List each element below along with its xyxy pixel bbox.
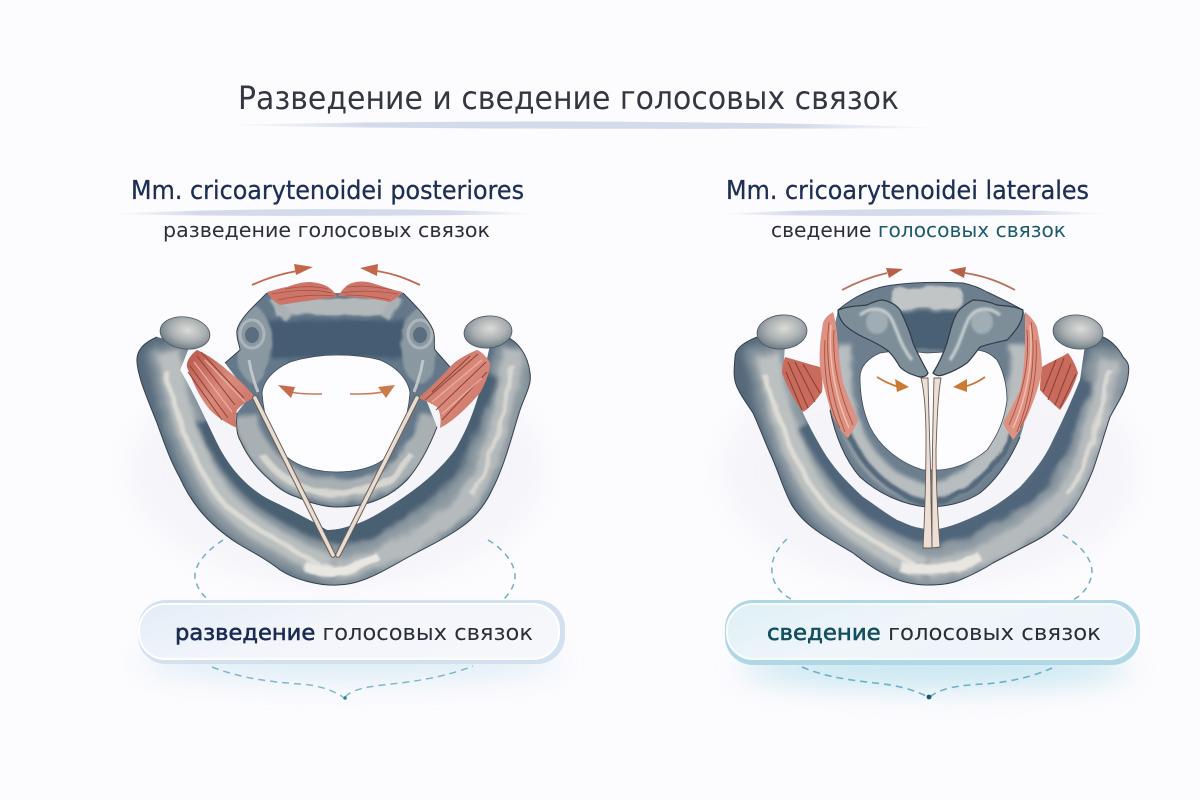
side muscle right — [1040, 353, 1078, 410]
side muscle left — [782, 357, 822, 412]
glottic opening — [262, 355, 410, 472]
cricoid ring — [224, 292, 450, 508]
thyroid cartilage — [136, 336, 531, 586]
right heading: Mm. cricoarytenoidei laterales — [726, 176, 1089, 206]
brace tip left — [343, 696, 347, 700]
pill text right: сведение голосовых связок — [767, 621, 1101, 646]
title: Разведение и сведение голосовых связок — [238, 79, 899, 117]
right larynx soft shadow — [725, 355, 1135, 585]
result pill right — [725, 600, 1140, 665]
vocal cord right — [338, 398, 417, 555]
dashed bracket upper right — [772, 535, 1092, 603]
left hyoid knob — [158, 314, 212, 352]
arytenoid right — [933, 300, 1023, 376]
arrow: top right right panel — [949, 267, 1015, 290]
glow under right pill — [740, 648, 1130, 688]
arrow: inner left right panel — [877, 377, 909, 392]
title underline swoosh — [222, 122, 945, 129]
arytenoid left — [838, 300, 928, 377]
right hyoid knob — [463, 314, 513, 350]
cricoid ring right — [830, 282, 1025, 508]
arrow: inner left — [278, 385, 322, 398]
panel: left, posterior muscles — [110, 176, 565, 700]
illustration: larynx with adducted cords — [725, 280, 1140, 595]
long muscle right — [1003, 312, 1042, 440]
muscle: top left — [267, 282, 337, 305]
long muscle left — [820, 312, 858, 438]
muscle: top right — [338, 282, 403, 302]
hyoid knob right — [1051, 312, 1105, 352]
dashed brace lower left — [212, 666, 473, 697]
muscle: right lateral band — [418, 350, 490, 428]
left heading underline — [110, 209, 540, 216]
arrow: top left — [252, 264, 313, 285]
result pill left — [138, 600, 565, 664]
arrow: inner right right panel — [953, 377, 985, 392]
left heading: Mm. cricoarytenoidei posteriores — [131, 176, 524, 206]
illustration: larynx with abducted cords — [125, 282, 545, 595]
dashed bracket upper — [195, 540, 515, 603]
right heading underline — [716, 209, 1110, 216]
brace tip right — [927, 695, 931, 699]
left larynx soft shadow — [132, 355, 542, 585]
glottic opening right — [860, 350, 1007, 470]
dashed brace lower right — [802, 667, 1052, 697]
vocal cord left fill — [255, 398, 333, 555]
vocal cord adducted right — [932, 378, 941, 548]
thyroid cartilage right — [734, 336, 1130, 586]
right subheading: сведение голосовых связок — [771, 218, 1066, 242]
pill text left: разведение голосовых связок — [175, 621, 533, 646]
glow under left pill — [140, 644, 560, 680]
vocal cord left — [255, 398, 333, 555]
panel: right, lateral muscles — [716, 176, 1140, 699]
left subheading: разведение голосовых связок — [163, 218, 490, 242]
hyoid knob left — [756, 313, 808, 351]
vocal cord right fill — [338, 398, 417, 555]
arrow: top right — [360, 264, 420, 285]
muscle: left lateral band — [187, 350, 255, 428]
arrow: inner right — [350, 385, 395, 398]
vocal cord adducted left — [921, 378, 932, 548]
arrow: top left right panel — [842, 268, 903, 290]
